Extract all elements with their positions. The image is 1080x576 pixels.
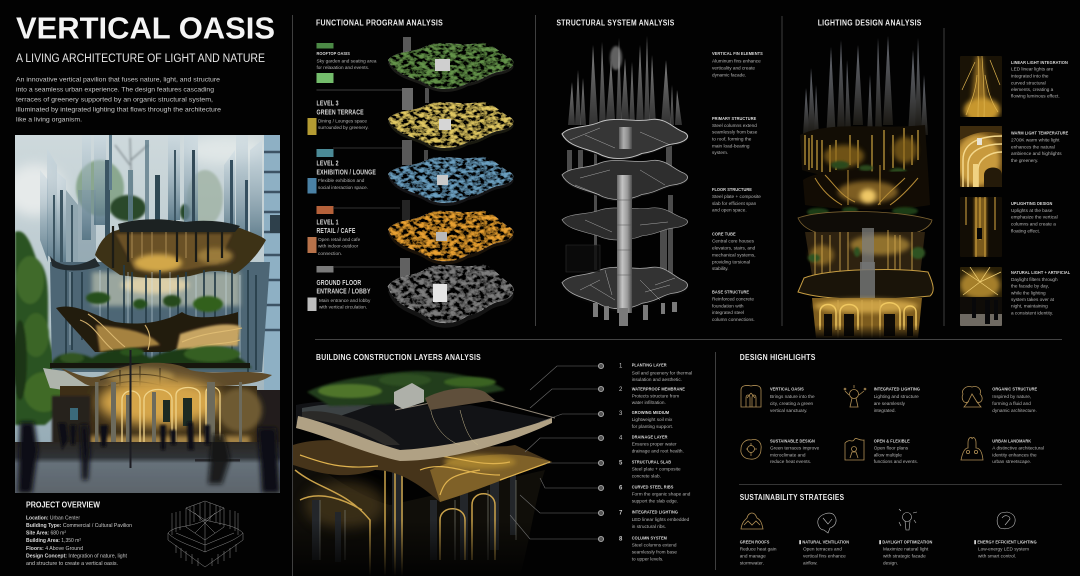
layer list (619, 362, 692, 562)
linear light text (1011, 60, 1068, 99)
primary structure callout (712, 116, 758, 155)
layer list: for planting support. (632, 424, 673, 429)
project overview facts (26, 516, 132, 567)
floor structure callout: and open space. (712, 208, 747, 213)
level 1 legend: connection. (318, 251, 342, 256)
level 3 legend: GREEN TERRACE (317, 109, 364, 117)
green roofs text (740, 539, 777, 565)
panel: structural system analysis (556, 18, 763, 326)
panel: sustainability strategies (740, 492, 1037, 565)
natural and artificial text: while the lighting (1011, 290, 1046, 295)
natural and artificial text (1011, 270, 1071, 315)
highlight: open and flexible: allow multiple (874, 452, 902, 457)
green roofs text: GREEN ROOFS (740, 539, 769, 545)
level 2 legend: social interaction space. (318, 185, 368, 190)
subtitle: A LIVING ARCHITECTURE OF LIGHT AND NATURE (16, 51, 265, 65)
title: VERTICAL OASIS (16, 10, 275, 46)
highlight: integrated lighting: integrated. (874, 408, 896, 413)
layer list: seamlessly from base (632, 550, 677, 555)
core tube callout: providing torsional (712, 259, 750, 264)
warm light text (1011, 130, 1068, 163)
layer list: support the slab edge. (632, 499, 678, 504)
warm light text: the greenery. (1011, 158, 1038, 163)
energy efficient lighting text: ▮ ENERGY EFFICIENT LIGHTING (974, 539, 1037, 545)
level 1 legend (308, 219, 400, 272)
icon: vertical oasis (741, 385, 761, 407)
layer list: 1 (619, 364, 623, 370)
natural and artificial text: Daylight filters through (1011, 277, 1058, 282)
panel: functional program analysis (308, 18, 514, 328)
uplighting text: emphasize the vertical (1011, 215, 1058, 220)
highlight: integrated lighting: INTEGRATED LIGHTING (874, 386, 920, 392)
energy efficient lighting text: with smart control. (978, 554, 1016, 559)
vertical fin callout (712, 51, 763, 77)
core tube callout: Central core houses (712, 239, 755, 244)
exploded construction section (293, 371, 555, 576)
primary structure callout: seamlessly from base (712, 130, 758, 135)
icon: urban landmark (961, 437, 983, 460)
highlight: vertical oasis (770, 386, 815, 413)
layer list: 6 (619, 486, 623, 492)
highlight: open and flexible: Open floor plans (874, 446, 909, 451)
upper glass fins (40, 135, 262, 268)
layer list: WATERPROOF MEMBRANE (632, 386, 685, 391)
uplighting text: Uplights at the base (1011, 208, 1053, 213)
highlight: organic structure: Inspired by nature, (992, 394, 1031, 399)
primary structure callout: main load-bearing (712, 143, 750, 148)
primary structure callout: to roof, forming the (712, 136, 752, 141)
daylight optimization text: with strategic facade (883, 554, 926, 559)
floor structure callout: slab for efficient span (712, 201, 757, 206)
primary structure callout: PRIMARY STRUCTURE (712, 116, 756, 121)
layer list: Steel plate + composite (632, 467, 681, 472)
structural heading: STRUCTURAL SYSTEM ANALYSIS (556, 18, 674, 28)
ground floor legend: GROUND FLOOR (317, 279, 362, 287)
base structure callout: BASE STRUCTURE (712, 289, 749, 295)
numbered markers (598, 363, 604, 542)
daylight optimization text: design. (883, 560, 898, 565)
terrace with gold bands (56, 307, 238, 352)
thumbnail: natural and artificial (960, 267, 1002, 326)
panel: lighting design analysis (798, 18, 1071, 339)
natural ventilation text: airflow. (803, 560, 818, 565)
level 3 legend: LEVEL 3 (317, 100, 339, 108)
daylight optimization text (879, 539, 932, 565)
primary structure callout: Steel columns extend (712, 123, 757, 128)
uplighting text: UPLIGHTING DESIGN (1011, 201, 1052, 206)
level 3 legend (308, 100, 402, 157)
panel: design highlights (740, 352, 1044, 464)
project overview facts: Building Area: 1,350 m² (26, 538, 81, 544)
slab with curved ribs (60, 362, 272, 386)
ground floor legend: with vertical circulation. (319, 304, 367, 310)
floor structure callout: Steel plate + composite (712, 194, 761, 199)
project overview heading: PROJECT OVERVIEW (26, 500, 101, 510)
linear light text: LED linear lights are (1011, 67, 1054, 72)
core tube callout: mechanical systems, (712, 253, 756, 258)
intro paragraph: illuminated by integrated lighting that flows through the architecture (16, 106, 221, 113)
project overview facts: Location: Urban Center (26, 516, 80, 522)
daylight optimization text: Maximize natural light (883, 547, 929, 552)
core tube callout: CORE TUBE (712, 231, 736, 237)
project overview facts: Site Area: 680 m² (26, 531, 66, 537)
highlight: sustainable design: reduce heat events. (770, 459, 811, 464)
level 1 legend: LEVEL 1 (317, 219, 339, 227)
pedestrians (18, 422, 280, 493)
uplighting text: columns and create a (1011, 221, 1056, 226)
rooftop oasis legend: Sky garden and seating area (316, 58, 377, 63)
layer list: Form the organic shape and (632, 492, 691, 497)
highlight: open and flexible (874, 438, 918, 464)
layer list: LED linear lights embedded (632, 517, 690, 522)
icon: green roofs (741, 513, 763, 529)
neighbouring tower (256, 135, 280, 442)
uplighting text (1011, 201, 1058, 233)
icon: integrated lighting (844, 385, 866, 407)
layer list: Soil and greenery for thermal (632, 370, 692, 375)
thumbnail: warm light (956, 126, 1002, 187)
functional heading: FUNCTIONAL PROGRAM ANALYSIS (316, 18, 443, 28)
highlight: urban landmark: identity enhances the (992, 452, 1037, 457)
layer list: 8 (619, 536, 623, 542)
layer list: Lightweight soil mix (632, 417, 673, 422)
project overview facts: Building Type: Commercial / Cultural Pavilion (26, 523, 132, 529)
pavement (15, 442, 280, 493)
layer list: DRAINAGE LAYER (632, 434, 668, 439)
layer list: 3 (619, 411, 623, 417)
glass mullions (66, 265, 256, 375)
vertical fin callout: verticality and create (712, 65, 755, 70)
structural wireframe model (562, 36, 688, 326)
highlights heading: DESIGN HIGHLIGHTS (740, 352, 816, 362)
base structure callout: integrated steel (712, 310, 744, 315)
layer list: COLUMN SYSTEM (632, 535, 667, 540)
energy efficient lighting text: Low-energy LED system (978, 547, 1029, 552)
highlight: urban landmark: URBAN LANDMARK (992, 438, 1032, 443)
street pole (130, 350, 132, 468)
layer list: water infiltration. (632, 400, 666, 405)
thumbnail: linear light (960, 56, 1002, 122)
glass second storey (50, 262, 270, 372)
rooftop oasis legend (316, 43, 402, 90)
leader lines (510, 366, 598, 539)
level 3 legend: Dining / Lounges space (318, 118, 367, 124)
natural and artificial text: system takes over at (1011, 297, 1055, 302)
layer list: 2 (619, 387, 623, 393)
layer list: 5 (619, 460, 623, 466)
highlight: vertical oasis: city, creating a green (770, 401, 814, 406)
natural ventilation text: vertical fins enhance (803, 554, 846, 559)
natural and artificial text: NATURAL LIGHT + ARTIFICIAL (1011, 270, 1071, 275)
rooftop trees (76, 138, 223, 226)
natural and artificial text: night, maintaining (1011, 304, 1048, 309)
green roofs text: and manage (740, 554, 766, 559)
linear light text: integrated into the (1011, 74, 1049, 79)
night-lit building (798, 36, 938, 339)
layer list: PLANTING LAYER (632, 362, 667, 368)
natural ventilation text (799, 539, 849, 565)
energy efficient lighting text (974, 539, 1037, 559)
core tube callout (712, 231, 756, 271)
layer list: CURVED STEEL RIBS (632, 484, 673, 490)
concrete layer (296, 416, 552, 461)
level 2 legend: EXHIBITION / LOUNGE (317, 169, 376, 177)
layer list: INTEGRATED LIGHTING (632, 509, 678, 515)
wireframe model (168, 501, 243, 567)
level 3 legend: surrounded by greenery. (318, 125, 369, 130)
warm light text: WARM LIGHT TEMPERATURE (1011, 130, 1068, 136)
floor structure callout: FLOOR STRUCTURE (712, 187, 752, 192)
layer list: drainage and root health. (632, 448, 684, 453)
project overview facts: and structure to create a vertical oasis. (26, 561, 118, 567)
natural and artificial text: the facade by day, (1011, 284, 1049, 289)
highlight: organic structure (992, 386, 1037, 413)
exploded floor plates (388, 37, 514, 328)
highlight: sustainable design: Green terraces improve (770, 446, 820, 451)
level 1 legend: with indoor-outdoor (318, 244, 359, 248)
highlight: sustainable design (770, 438, 820, 464)
street tree (15, 230, 60, 427)
gold rib slab (293, 440, 552, 502)
highlight: vertical oasis: vertical sanctuary. (770, 408, 807, 413)
layer list: Protects structure from (632, 393, 679, 398)
highlight: urban landmark (992, 438, 1044, 464)
primary structure callout: system. (712, 150, 728, 155)
icon: sustainable design (741, 440, 761, 459)
green roofs text: stormwater. (740, 560, 764, 565)
linear light text: elements, creating a (1011, 87, 1054, 92)
warm light text: ambience and highlights (1011, 151, 1062, 156)
lighting heading: LIGHTING DESIGN ANALYSIS (818, 18, 922, 28)
highlight: organic structure: ORGANIC STRUCTURE (992, 386, 1037, 392)
base structure callout: foundation with (712, 303, 744, 308)
highlight: integrated lighting: are seamlessly (874, 401, 906, 406)
ground floor legend: Main entrance and lobby (319, 298, 371, 303)
rooftop oasis legend: ROOFTOP OASIS (316, 51, 350, 56)
panel: building construction layers (293, 352, 692, 576)
icon: daylight optimization (899, 509, 917, 530)
layer list: concrete slab. (632, 474, 661, 479)
project overview facts: Floors: 4 Above Ground (26, 546, 83, 552)
highlight: integrated lighting: Lighting and structure (874, 394, 919, 399)
level 1 legend: Open retail and cafe (318, 237, 361, 242)
highlight: urban landmark: urban streetscape. (992, 459, 1031, 464)
main canopy (95, 223, 266, 278)
ground floor legend: ENTRANCE / LOBBY (317, 288, 371, 296)
lower greenery (52, 346, 252, 368)
warm light text: 2700K warm white light (1011, 138, 1060, 143)
floor structure callout (712, 187, 761, 213)
awning (43, 368, 90, 390)
natural ventilation text: ▮ NATURAL VENTILATION (799, 539, 849, 545)
base structure callout: column connections. (712, 317, 755, 322)
green roofs text: Reduce heat gain (740, 547, 777, 552)
icon: open and flexible (845, 438, 864, 460)
layer list: GROWING MEDIUM (632, 410, 669, 415)
natural ventilation text: Open terraces and (803, 547, 842, 552)
rooftop oasis legend: for relaxation and events. (316, 65, 369, 70)
core tube callout: elevators, stairs, and (712, 246, 756, 251)
icon: energy efficient lighting (997, 512, 1015, 529)
glowing ground floor (60, 386, 257, 444)
level 2 legend: Flexible exhibition and (318, 178, 365, 183)
natural and artificial text: a consistent identity. (1011, 310, 1053, 315)
greenery tier (86, 292, 223, 312)
highlight: open and flexible: functions and events. (874, 459, 918, 464)
vertical fin callout: dynamic facade. (712, 72, 746, 77)
vertical fin callout: Aluminum fins enhance (712, 58, 761, 63)
highlight: sustainable design: microclimate and (770, 452, 806, 457)
hero photo of pavilion (5, 135, 280, 493)
intro paragraph (16, 76, 221, 123)
vertical fin callout: VERTICAL FIN ELEMENTS (712, 51, 763, 56)
icon: natural ventilation (818, 513, 836, 533)
layer list: 4 (619, 436, 623, 442)
thumbnail: uplighting (960, 197, 1002, 257)
warm light text: enhances the natural (1011, 144, 1055, 149)
dark deck (296, 401, 552, 456)
planting (307, 371, 505, 406)
layer list: 7 (619, 510, 623, 516)
linear light text: LINEAR LIGHT INTEGRATION (1011, 60, 1068, 65)
highlight: sustainable design: SUSTAINABLE DESIGN (770, 438, 815, 443)
base structure callout (712, 289, 755, 322)
layer list: Steel columns extend (632, 542, 677, 547)
highlight: vertical oasis: Brings nature into the (770, 394, 815, 399)
layers heading: BUILDING CONSTRUCTION LAYERS ANALYSIS (316, 352, 481, 362)
sustainability heading: SUSTAINABILITY STRATEGIES (740, 492, 844, 502)
layer list: to upper levels. (632, 557, 663, 562)
layer list: in structural ribs. (632, 524, 666, 529)
highlight: organic structure: dynamic architecture. (992, 408, 1037, 413)
highlight: organic structure: forming a fluid and (992, 401, 1031, 406)
daylight optimization text: ▮ DAYLIGHT OPTIMIZATION (879, 539, 932, 545)
linear light text: curved structural (1011, 80, 1046, 85)
base structure callout: Reinforced concrete (712, 297, 754, 302)
intro paragraph: An innovative vertical pavilion that fuses nature, light, and structure (16, 76, 220, 83)
intro paragraph: like a living organism. (16, 116, 82, 123)
level 2 legend (308, 160, 400, 214)
highlight: urban landmark: A distinctive architectural (992, 446, 1044, 451)
core tube callout: stability. (712, 266, 729, 271)
linear light text: flowing luminous effect. (1011, 94, 1060, 99)
level 1 legend: RETAIL / CAFE (317, 227, 355, 235)
highlight: open and flexible: OPEN & FLEXIBLE (874, 438, 910, 443)
layer list: insulation and aesthetic. (632, 377, 682, 382)
layer list: STRUCTURAL SLAB (632, 459, 671, 465)
intro paragraph: terraces of greenery supported by an organic structural system, (16, 96, 213, 103)
highlight: integrated lighting (874, 386, 920, 413)
ground floor legend (308, 279, 371, 311)
intro paragraph: into a seamless urban experience. The design features cascading (16, 86, 214, 93)
icon: organic structure (962, 387, 982, 407)
layer list: Ensures proper water (632, 441, 677, 446)
uplighting text: floating effect. (1011, 228, 1040, 233)
project overview facts: Design Concept: Integration of nature, light (26, 554, 127, 560)
highlight: vertical oasis: VERTICAL OASIS (770, 386, 804, 392)
level 2 legend: LEVEL 2 (317, 160, 339, 168)
